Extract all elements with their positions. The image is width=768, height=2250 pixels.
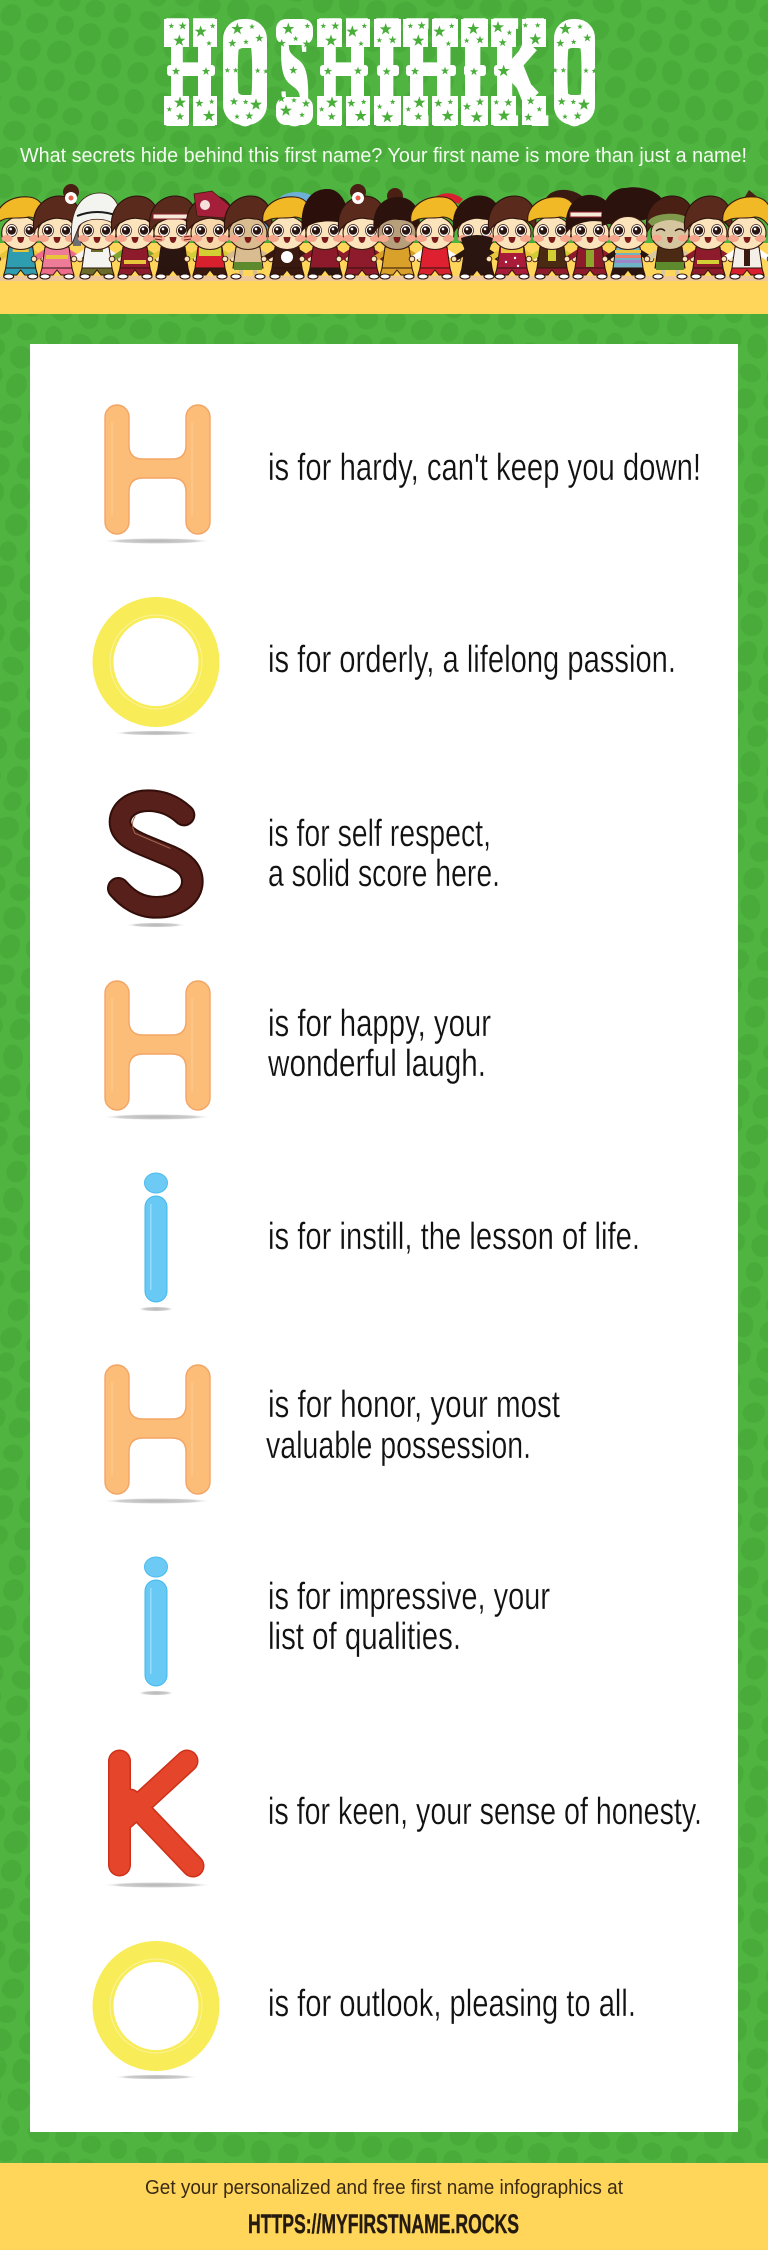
- header title: [20, 0, 747, 167]
- footer band: [0, 2163, 768, 2250]
- title: HOSHIHIKO wordmark: [164, 0, 597, 160]
- row 3: S: [118, 801, 500, 928]
- letter S: [118, 801, 192, 928]
- subtitle: What secrets hide behind this first name? Your first name is more than just a name!: [20, 145, 747, 167]
- letter O: [103, 608, 209, 736]
- character: tan child in grass skirt: [222, 196, 274, 279]
- footer URL: HTTPS://MYFIRSTNAME.ROCKS: [248, 2209, 519, 2239]
- text: honor: [266, 1384, 560, 1467]
- yellow band behind characters: [0, 243, 768, 314]
- letter i: [138, 1173, 174, 1312]
- row 1: H: [102, 405, 701, 544]
- character: spiky-haired child in rainbow shirt: [601, 187, 664, 279]
- character: blond child with blue cap in black and white: [261, 192, 317, 279]
- panel: white letter panel: [30, 344, 738, 2132]
- letter H: [102, 1365, 212, 1504]
- character: blond child with red hat and red dress: [409, 193, 463, 279]
- text: happy: wonderful laugh.: [267, 1043, 486, 1085]
- character: child with green leaf fringe in grass skirt: [644, 196, 696, 279]
- row 4: H: [102, 981, 491, 1120]
- text: impressive: list of qualities.: [268, 1616, 461, 1658]
- character: child with headband in black outfit: [147, 196, 199, 279]
- character: child in tall black hat and maroon jacket: [299, 189, 351, 279]
- text: happy: [267, 1003, 491, 1085]
- text: impressive: is for impressive, your: [268, 1576, 550, 1618]
- text: happy: is for happy, your: [268, 1003, 491, 1045]
- letter H: [102, 405, 212, 544]
- letter O: [103, 1952, 209, 2080]
- text: impressive: [268, 1576, 550, 1658]
- row 5: i: [138, 1173, 640, 1312]
- illustration: row of children in world costumes: [0, 184, 768, 279]
- text: instill: is for instill, the lesson of life.: [268, 1216, 640, 1258]
- row 9: O: [103, 1952, 636, 2080]
- letter i: [138, 1557, 174, 1696]
- text: honor: is for honor, your most: [268, 1384, 560, 1426]
- character: bearded child in black: [451, 196, 503, 279]
- character: spiky blond child in brown vest: [526, 190, 588, 279]
- character: child in white keffiyeh: [71, 193, 123, 279]
- character: child in maroon robe: [109, 196, 161, 279]
- row 8: K: [102, 1761, 702, 1888]
- character: blond boy in blue overalls: [0, 197, 47, 279]
- character: child with red hat and skirt: [184, 191, 236, 279]
- character: headband child in maroon with green stripe: [564, 195, 616, 279]
- character: blond child with ears in white and red dress: [721, 190, 768, 279]
- text: self respect: a solid score here.: [268, 853, 500, 895]
- footer text: Get your personalized and free first name infographics at: [145, 2177, 623, 2199]
- row 7: i: [138, 1557, 550, 1696]
- character: child in maroon robe with plaster: [682, 196, 734, 279]
- character: dark-haired child in gold robe: [371, 188, 423, 279]
- row 2: O: [103, 608, 676, 736]
- text: honor: valuable possession.: [266, 1425, 531, 1467]
- character: girl with polka-dot skirt: [486, 196, 538, 279]
- text: outlook: is for outlook, pleasing to all.: [268, 1983, 636, 2025]
- character: girl in pink kimono: [31, 184, 83, 279]
- letter H: [102, 981, 212, 1120]
- row 6: H: [102, 1365, 560, 1504]
- letter K: [102, 1761, 212, 1888]
- text: self respect: is for self respect,: [268, 813, 491, 855]
- character: girl with flower bun in maroon: [336, 184, 388, 279]
- text: self respect: [268, 813, 500, 895]
